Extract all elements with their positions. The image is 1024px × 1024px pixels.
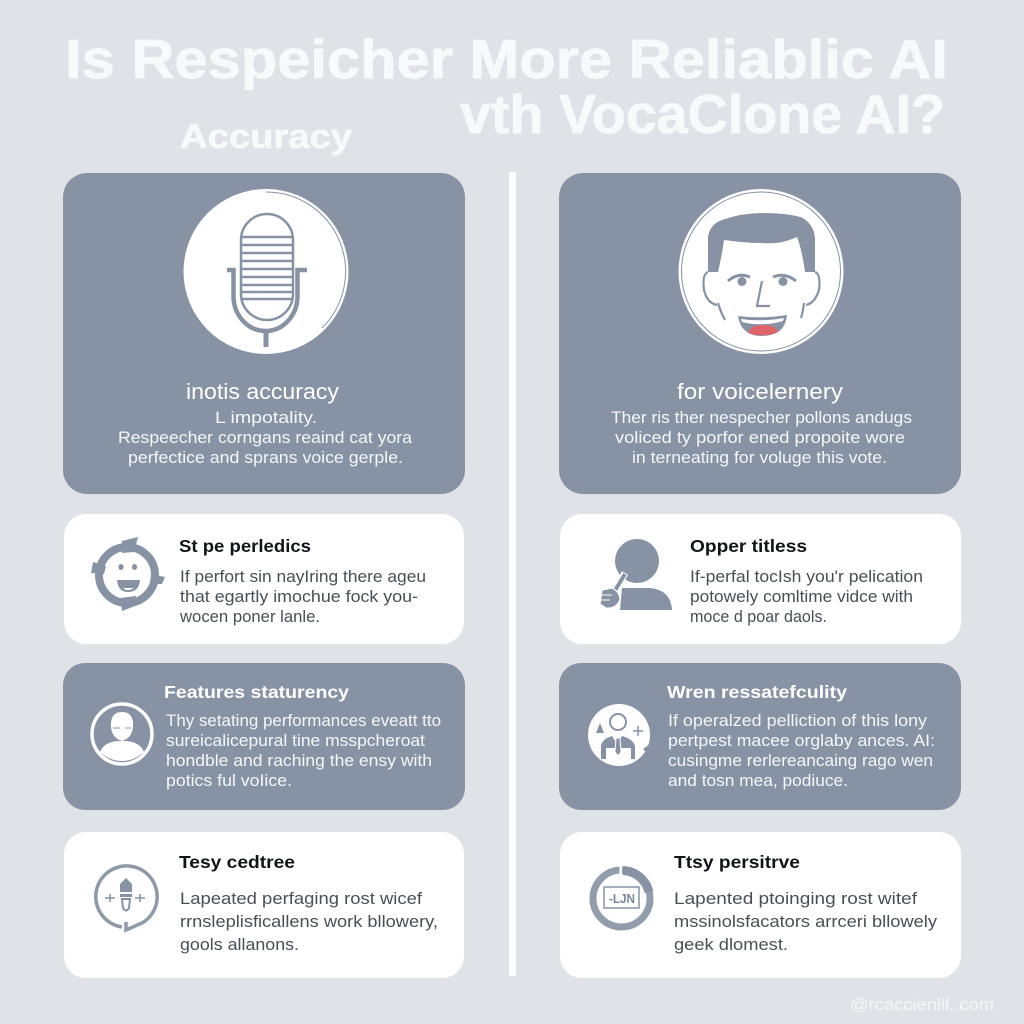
panel: left card 2 [63, 663, 465, 810]
icon: smiling face [678, 189, 844, 354]
title: vth VocaClone AI? [460, 83, 945, 145]
icon: ring with screen: -LJN [609, 891, 635, 906]
hero body text: Respeecher corngans reaind cat yora [118, 429, 413, 447]
card body: wocen poner lanle. [179, 608, 320, 626]
hero body text [118, 409, 413, 467]
panel: right hero voice [559, 173, 961, 494]
hero body text: Ther ris ther nespecher pollons andugs [611, 409, 912, 427]
title: Is Respeicher More Reliablic AI [65, 28, 948, 90]
card heading: St pe perledics [179, 536, 311, 556]
card heading: Features staturency [164, 682, 349, 702]
card body: If perfort sin nayIring there ageu [180, 568, 426, 586]
panel: left hero accuracy [63, 173, 465, 494]
card body: Thy setating performances eveatt tto [166, 712, 441, 730]
card body: moce d poar daols. [690, 608, 827, 626]
icon: microphone [184, 189, 348, 354]
panel: left card 3 [64, 832, 464, 978]
card body: mssinolsfacators arrceri bllowely [674, 913, 938, 931]
heading: accuracy: Accuracy [180, 118, 352, 156]
card body: potics ful voIice. [166, 772, 292, 790]
card body [179, 568, 426, 626]
icon: person with sparkles [588, 704, 651, 766]
panel: left card 1 [64, 514, 464, 644]
hero heading: inotis accuracy [186, 379, 339, 404]
panel: right card 2 [559, 663, 961, 810]
card body: If operalzed pelliction of this lony [668, 712, 928, 730]
card body: that egartly imochue fock you- [180, 588, 418, 606]
hero body text: in terneating for voluge this vote. [632, 449, 887, 467]
hero body text [611, 409, 912, 467]
card body: pertpest macee orglaby ances. AI: [668, 732, 935, 750]
title [65, 28, 948, 145]
card body: gools allanons. [180, 936, 299, 954]
panel: right card 3 [560, 832, 961, 978]
card heading: Tesy cedtree [179, 852, 295, 872]
card body: Lapeated perfaging rost wicef [180, 890, 422, 908]
icon: mic in speech bubble [96, 866, 157, 930]
icon: person in ring [92, 704, 152, 764]
hero body text: perfectice and sprans voice gerple. [128, 449, 403, 467]
card body: and tosn mea, podiuce. [668, 772, 848, 790]
icon: ring with screen [593, 864, 650, 927]
card body: If-perfal tocIsh you'r pelication [690, 568, 923, 586]
panel: right card 1 [560, 514, 961, 644]
icon: target smiley [91, 537, 165, 611]
card body [690, 568, 923, 626]
hero body text: voliced ty porfor ened propoite wore [615, 429, 905, 447]
card body: sureicalicepural tine msspcheroat [166, 732, 425, 750]
card body: rrnsleplisficallens work bllowery, [180, 913, 438, 931]
card body [668, 712, 935, 790]
card body: cusingme rerlereancaing rago wen [668, 752, 933, 770]
hero body text: L impotality. [215, 409, 317, 427]
center divider [509, 172, 516, 976]
card body [180, 890, 438, 954]
card heading: Opper titless [690, 536, 807, 556]
card body: geek dlomest. [674, 936, 788, 954]
watermark: @rcaccienlil..com [850, 995, 994, 1014]
card body: Lapented ptoinging rost witef [674, 890, 917, 908]
hero heading: for voicelernery [677, 379, 843, 404]
card body [674, 890, 938, 954]
card body [166, 712, 441, 790]
icon: person with pen [600, 539, 672, 610]
card body: hondble and raching the ensy with [166, 752, 432, 770]
card body: potowely comltime vidce with [690, 588, 913, 606]
card heading: Wren ressatefculity [667, 682, 847, 702]
card heading: Ttsy persitrve [674, 852, 800, 872]
